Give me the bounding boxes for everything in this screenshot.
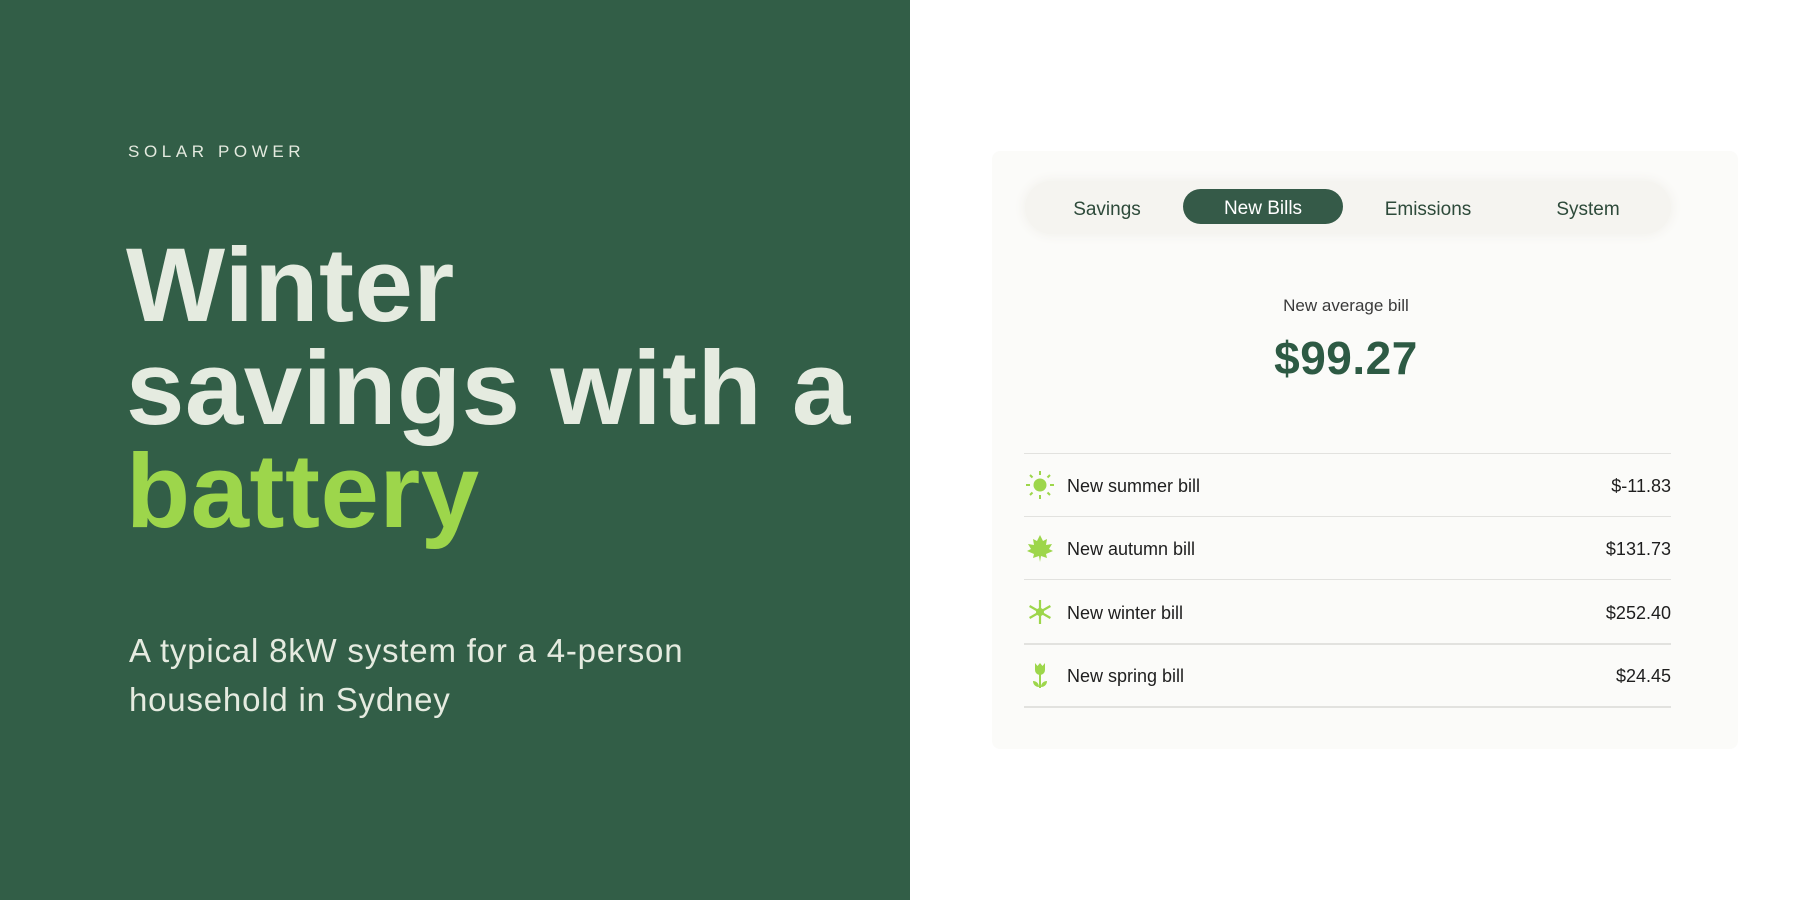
icon: sun (1026, 471, 1054, 499)
row: autumn (1027, 535, 1671, 562)
icon: snowflake (1029, 600, 1051, 624)
label: new average bill: New average bill (1283, 296, 1409, 315)
row: summer: $-11.83 (1611, 476, 1671, 496)
tab bar: Emissions (1385, 199, 1471, 220)
row: summer: New summer bill (1067, 476, 1200, 496)
panel: bills card (992, 151, 1738, 749)
title: savings with a (126, 330, 851, 447)
tab bar (1025, 181, 1671, 234)
subtitle: household in Sydney (129, 681, 451, 718)
row: spring (1033, 663, 1671, 688)
row: spring: New spring bill (1067, 666, 1184, 686)
icon: tulip (1033, 663, 1047, 688)
row: winter: New winter bill (1067, 603, 1183, 623)
panel: left title panel (0, 0, 910, 900)
tab bar: System (1556, 199, 1620, 220)
value: average bill: $99.27 (1274, 332, 1418, 384)
kicker: SOLAR POWER (128, 142, 305, 161)
active tab: New Bills (1183, 189, 1343, 224)
subtitle (129, 632, 683, 718)
title (126, 227, 851, 550)
subtitle: A typical 8kW system for a 4-person (129, 632, 683, 669)
icon: leaf (1027, 535, 1053, 562)
row: autumn: $131.73 (1606, 539, 1671, 559)
row: winter: $252.40 (1606, 603, 1671, 623)
tab bar: Savings (1073, 199, 1141, 220)
row: autumn: New autumn bill (1067, 539, 1195, 559)
row: summer (1026, 471, 1671, 499)
active tab: New Bills: New Bills (1224, 198, 1302, 219)
title: battery (126, 433, 480, 550)
row: spring: $24.45 (1616, 666, 1671, 686)
title: Winter (126, 227, 455, 344)
row: winter (1029, 600, 1671, 624)
